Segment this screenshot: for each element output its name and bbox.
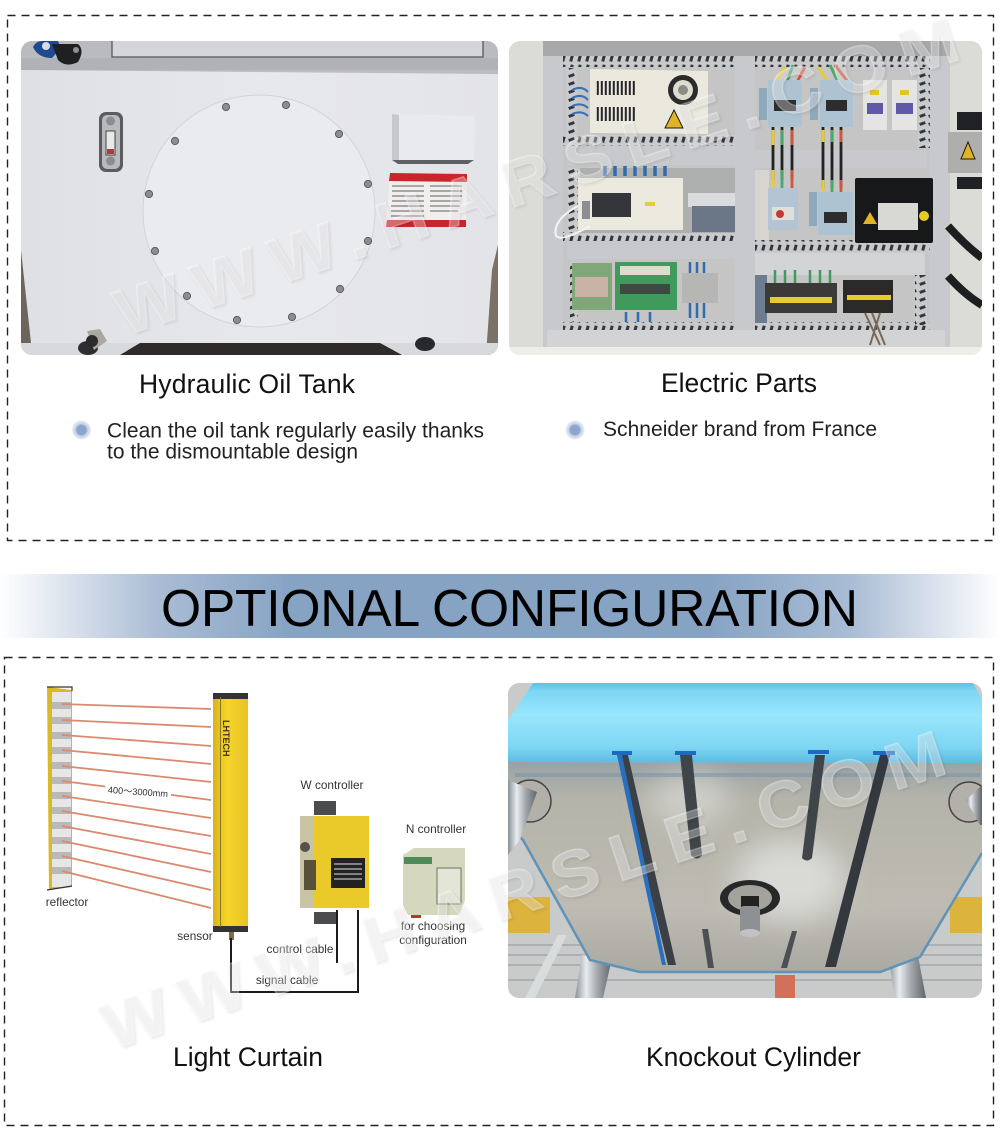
photo: hydraulic oil tank [21,41,498,355]
watermark: lower: WWW.HARSLE.COM [93,718,954,1064]
heading: knockout cylinder: Knockout Cylinder [646,1042,861,1072]
sensor [213,693,248,940]
diagram labels: configuration [399,933,467,947]
diagram labels: N controller [406,822,466,836]
text: oil tank description [107,420,484,464]
underside plate [508,762,982,972]
reflector [47,687,72,890]
diagram labels: sensor [177,929,213,943]
side junction box and cables [948,112,982,305]
heading: hydraulic oil tank: Hydraulic Oil Tank [139,369,356,399]
lower guide columns [525,935,926,998]
panel: lower dashed frame [4,658,994,1126]
bolts [145,101,372,324]
heading: light curtain: Light Curtain [173,1042,323,1072]
power supply [590,69,708,134]
watermark: upper: WWW.HARSLE.COM [106,4,967,350]
side columns [508,780,989,855]
panel: upper dashed frame [8,16,994,540]
transformer [855,178,933,243]
terminal boards [572,262,893,345]
blue top face [508,683,982,763]
T-slots [612,750,895,968]
small cover box [392,114,475,164]
sensor: LHTECH [221,720,231,756]
photo: electric parts [509,41,982,355]
banner: optional configuration: OPTIONAL CONFIGURATION [161,579,858,637]
circuit breakers [863,80,917,130]
cables [231,910,358,992]
bullet icon: oil tank [72,421,90,439]
N controller [403,848,465,918]
oil level gauge [99,112,123,172]
oil tank knobs [33,41,82,65]
distance label: 400～3000mm [108,785,169,799]
diagram labels: reflector [46,895,88,909]
knockout cylinder rod [720,880,780,937]
PLC [555,166,683,238]
light beams [62,704,211,908]
drain fitting [86,329,107,350]
text: oil tank description: Clean the oil tank regularly easily thanks [107,420,484,442]
diagram labels: W controller [301,778,364,792]
diagram labels: for choosing [401,919,465,933]
upper wires [773,65,848,192]
contactors [759,80,853,235]
text: electric parts description: Schneider brand from France [603,418,877,441]
diagram labels: control cable [267,942,334,956]
diagram: light curtain [46,687,467,992]
photo: knockout cylinder [508,683,989,998]
cover plate [143,95,375,327]
warning label [386,173,467,227]
W controller [300,801,369,924]
banner: optional configuration [0,574,1000,638]
cabinet frame [543,41,950,347]
perforated wire ducts [563,56,930,331]
diagram labels: signal cable [256,973,319,987]
diagram labels [46,778,467,987]
heading: electric parts: Electric Parts [661,368,817,398]
bullet icon: electric parts [566,421,584,439]
text: oil tank description: to the dismountable design [107,440,358,464]
